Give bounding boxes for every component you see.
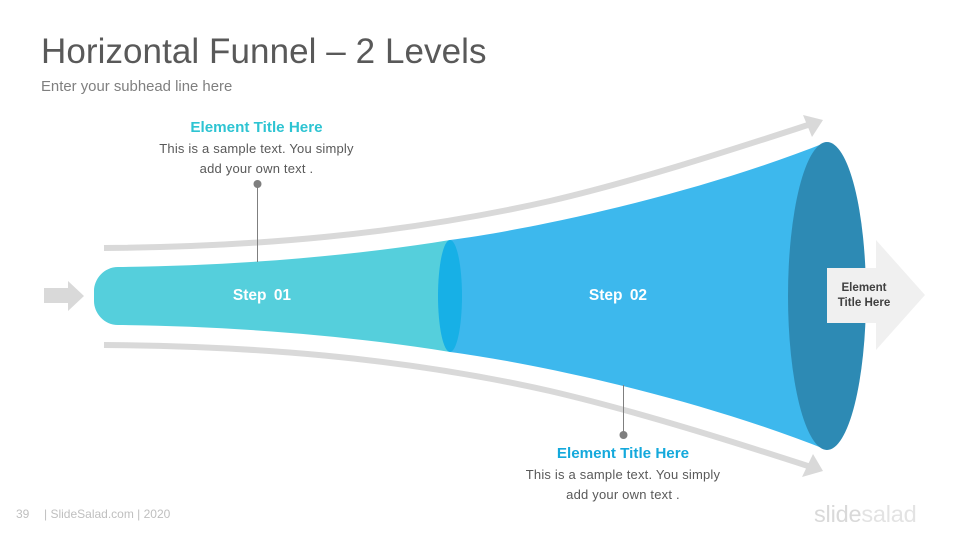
- callout text: add your own text .: [200, 161, 313, 176]
- funnel section: step 01: [94, 240, 450, 352]
- callout text: add your own text .: [566, 487, 680, 502]
- callout text: [159, 141, 354, 176]
- output arrow: [827, 240, 925, 350]
- callout: bottom: [526, 445, 720, 502]
- funnel mouth ellipse: [788, 142, 866, 450]
- footer text: | SlideSalad.com | 2020: [44, 507, 170, 521]
- label: step 01: Step 01: [233, 287, 291, 304]
- label: output element: [838, 281, 890, 309]
- callout title: Element Title Here: [190, 119, 323, 136]
- label: output element: Title Here: [838, 296, 890, 309]
- page number: 39: [16, 507, 29, 521]
- label: step 02: Step 02: [589, 287, 647, 304]
- arrow: lower flow: [104, 345, 823, 477]
- funnel section: step 02: [450, 142, 827, 450]
- callout text: [526, 467, 720, 502]
- funnel joint ellipse: [438, 240, 462, 352]
- label: output element: Element: [841, 281, 887, 294]
- arrow: input: [44, 281, 84, 311]
- callout text: This is a sample text. You simply: [159, 141, 354, 156]
- logo wordmark: slidesalad: [814, 501, 917, 527]
- connector: bottom callout: [620, 385, 628, 439]
- footer: [16, 507, 170, 521]
- callout text: This is a sample text. You simply: [526, 467, 720, 482]
- connector: top callout: [254, 180, 262, 262]
- callout title: Element Title Here: [557, 445, 689, 462]
- subhead: Enter your subhead line here: [41, 79, 232, 95]
- title: Horizontal Funnel – 2 Levels: [41, 32, 487, 71]
- arrow: upper flow: [104, 115, 823, 248]
- callout: top: [159, 119, 354, 176]
